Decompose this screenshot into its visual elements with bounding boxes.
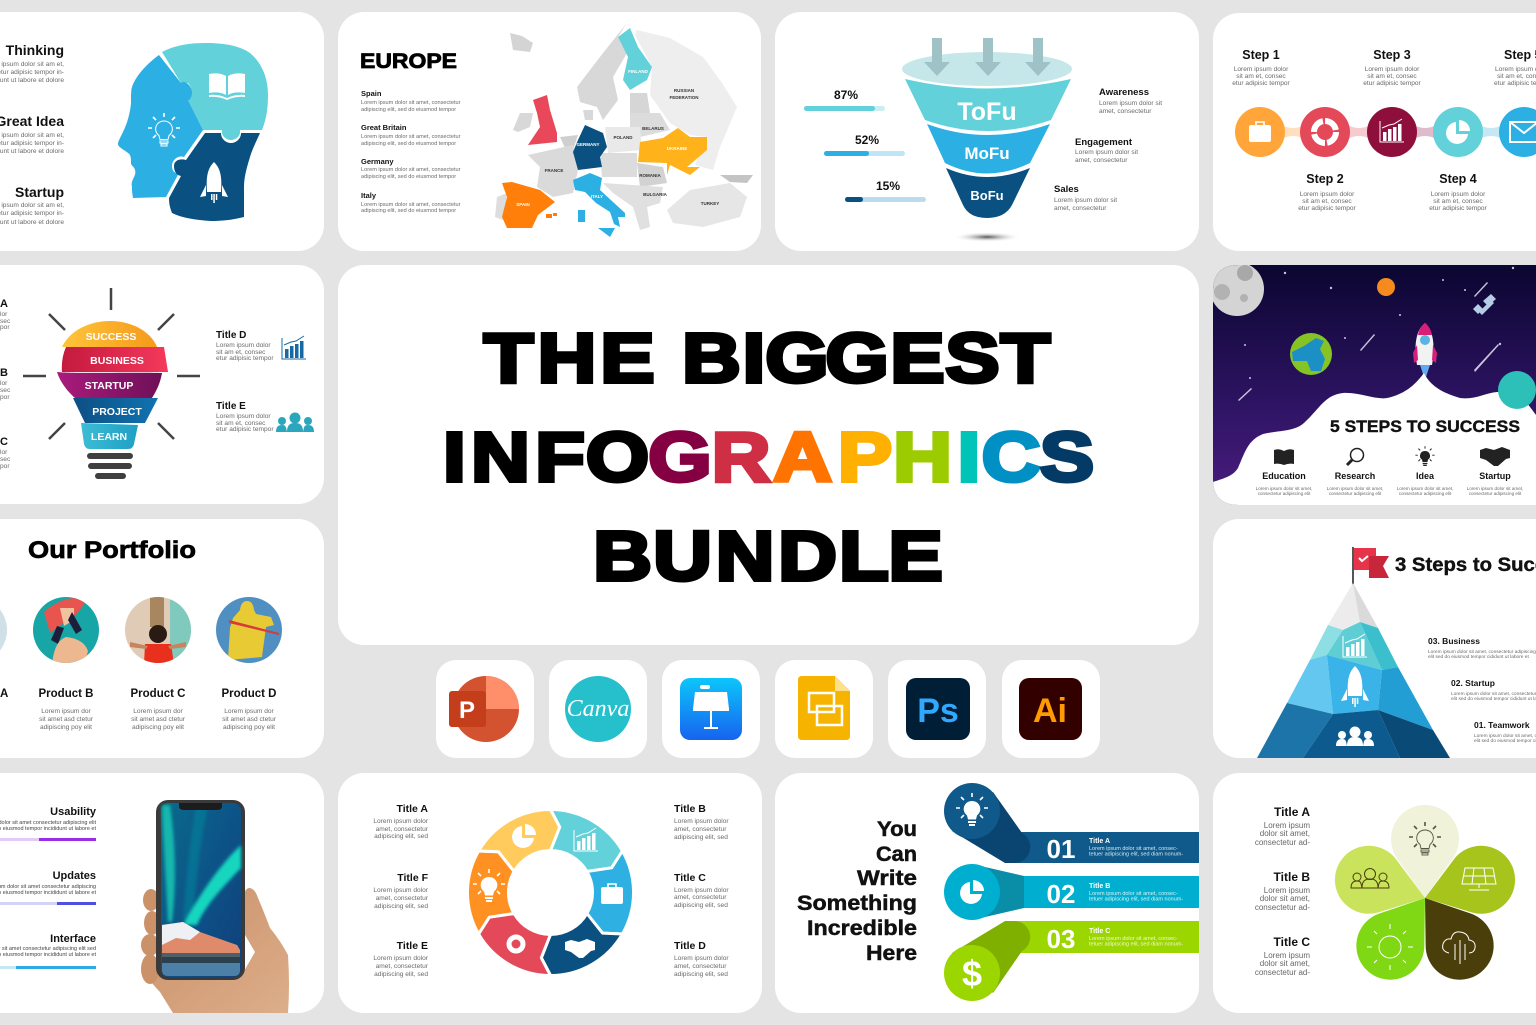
left labels: sec — [0, 456, 11, 463]
Title D: sit am et, consec — [216, 349, 266, 356]
progress 87% — [804, 88, 885, 111]
ribbon 01: tetuer adipiscing elit, sed diam nonum- — [1089, 852, 1183, 858]
label: Awareness: amet, consectetur — [1099, 108, 1152, 115]
Step 5 — [1494, 48, 1536, 87]
item: Great Britain: Lorem ipsum dolor sit amet, consectetur — [361, 134, 461, 140]
product D: Product D — [222, 688, 276, 700]
Title D — [216, 330, 274, 362]
map of Europe: SPAIN — [516, 202, 530, 207]
Title B: amet, consectetur — [674, 826, 727, 833]
funnel graphic: BoFu — [970, 188, 1004, 203]
panel: cycle — [338, 773, 762, 1013]
left labels: lor — [0, 449, 8, 456]
Title C: Title C — [1274, 935, 1310, 949]
label: Usability — [0, 806, 97, 841]
map of Europe: UKRAINE — [667, 146, 687, 151]
item: Germany: adipiscing elit, sed do eiusmod tempor — [361, 174, 456, 180]
step: Research: Lorem ipsum dolor sit amet, — [1327, 486, 1383, 491]
map of Europe: BELARUS — [642, 126, 664, 131]
Title C: adipiscing elit, sed — [674, 902, 728, 909]
label: 01 Teamwork: 01. Teamwork — [1474, 720, 1530, 730]
Title C: dolor sit amet, — [1260, 959, 1310, 968]
item: Germany: Germany — [361, 157, 394, 166]
heading stack: Here — [866, 942, 917, 965]
left labels: por — [0, 463, 10, 470]
Title B: Lorem ipsum — [1264, 886, 1310, 895]
Step 1: Lorem ipsum dolor — [1234, 66, 1289, 73]
label: 03 Business: 03. Business — [1428, 636, 1480, 646]
ribbon 01: Title A — [1089, 838, 1110, 845]
app icons row — [436, 660, 1100, 758]
Step 4: sit am et, consec — [1433, 198, 1483, 205]
Title F: Lorem ipsum dolor — [373, 887, 429, 894]
title line 1: THE BIGGEST — [484, 319, 1050, 398]
step: Idea — [1397, 446, 1453, 496]
funnel graphic: MoFu — [964, 144, 1010, 163]
label: Engagement: Engagement — [1075, 137, 1133, 148]
Title A: dolor sit amet, — [1260, 829, 1310, 838]
panel: petals — [1213, 773, 1536, 1013]
product C: Product C — [131, 688, 185, 700]
item: Italy: Italy — [361, 191, 377, 200]
Title C: Lorem ipsum — [1264, 951, 1310, 960]
step: Research: consectetur adipiscing elit — [1329, 491, 1382, 496]
label: Updates — [0, 870, 96, 905]
heading stack: Write — [857, 867, 917, 890]
Step 1: Step 1 — [1242, 48, 1280, 62]
progress 15%: 15% — [876, 179, 900, 193]
rocket — [1413, 323, 1437, 380]
tile: Canva — [549, 660, 647, 758]
Title E: Title E — [216, 401, 246, 412]
ribbon 01 — [944, 783, 1199, 864]
Title B — [674, 803, 729, 841]
satellite — [1473, 294, 1496, 315]
ribbon 02: Lorem ipsum dolor sit amet, consec- — [1089, 891, 1178, 897]
label: Engagement: Lorem ipsum dolor sit — [1075, 149, 1138, 156]
Step 2: Lorem ipsum dolor — [1300, 191, 1355, 198]
flag — [1352, 547, 1389, 589]
Title C — [1255, 935, 1310, 977]
stars and meteors — [1238, 267, 1514, 401]
ribbon 01: Lorem ipsum dolor sit amet, consec- — [1089, 846, 1178, 852]
planet teal — [1498, 371, 1536, 409]
Title C — [674, 872, 729, 909]
Step 3: Step 3 — [1373, 48, 1411, 62]
item: Italy — [361, 191, 461, 214]
step: Idea: consectetur adipiscing elit — [1399, 491, 1452, 496]
Title D: adipiscing elit, sed — [674, 971, 728, 978]
left labels: sec — [0, 318, 11, 325]
Step 1: sit am et, consec — [1236, 73, 1286, 80]
connectors — [1280, 124, 1504, 140]
heading: Startup: Startup — [15, 184, 64, 200]
label: Interface — [0, 933, 96, 969]
Title A: Lorem ipsum — [1264, 821, 1310, 830]
progress 15% — [845, 179, 926, 202]
Step 4: Lorem ipsum dolor — [1431, 191, 1486, 198]
Title A: Lorem ipsum dolor — [373, 818, 429, 825]
label: Sales — [1054, 184, 1117, 212]
item: Italy: Lorem ipsum dolor sit amet, consectetur — [361, 202, 461, 208]
lightbulb stack: BUSINESS — [90, 355, 144, 367]
label: 02 Startup: 02. Startup — [1451, 678, 1495, 688]
ribbon 03: tetuer adipiscing elit, sed diam nonum- — [1089, 942, 1183, 948]
tile: Illustrator — [1002, 660, 1100, 758]
left labels: C — [0, 436, 8, 448]
ribbon 03: 03 — [1047, 924, 1075, 954]
item: Great Britain — [361, 123, 461, 147]
left labels: B — [0, 367, 8, 379]
tile: Photoshop: Ps — [917, 692, 959, 730]
Title A: consectetur ad- — [1255, 838, 1310, 847]
panel: funnel — [775, 12, 1199, 251]
panel: head puzzle — [0, 12, 324, 251]
product D — [216, 597, 282, 731]
Step 4: etur adipisic tempor — [1429, 205, 1488, 212]
map of Europe: FINLAND — [628, 69, 649, 74]
label: 03 Business: Lorem ipsum dolor sit amet, consectetur adipiscing — [1428, 649, 1536, 655]
step: Idea: Idea — [1416, 471, 1435, 481]
Title C: consectetur ad- — [1255, 968, 1310, 977]
Step 4 — [1429, 172, 1488, 212]
Title F: Title F — [397, 872, 429, 884]
map of Europe: BULGARIA — [643, 192, 668, 197]
Step 4: Step 4 — [1439, 172, 1477, 186]
Title E — [216, 401, 274, 433]
item: Italy: adipiscing elit, sed do eiusmod tempor — [361, 208, 456, 214]
panel: 3 steps mountain — [1213, 519, 1536, 758]
Title B: adipiscing elit, sed — [674, 834, 728, 841]
product B: Product B — [39, 688, 93, 700]
item: Spain — [361, 89, 461, 113]
product D: Lorem ipsum dor — [224, 708, 275, 715]
Step 2 — [1298, 172, 1357, 212]
step: Education: Education — [1262, 471, 1306, 481]
Title D — [674, 940, 729, 978]
Title C: Lorem ipsum dolor — [674, 887, 729, 894]
label: Updates: Updates — [53, 870, 96, 882]
label: Sales: amet, consectetur — [1054, 205, 1107, 212]
Title D: Lorem ipsum dolor — [674, 955, 729, 962]
panel: Europe map — [338, 12, 761, 251]
lightbulb stack: STARTUP — [85, 380, 133, 392]
progress 52%: 52% — [855, 133, 879, 147]
product A — [0, 597, 8, 700]
heading: Great Idea — [0, 113, 64, 155]
Title A: Title A — [1274, 805, 1310, 819]
item: Great Britain: adipiscing elit, sed do eiusmod tempor — [361, 141, 456, 147]
cycle icons — [473, 824, 623, 958]
map of Europe: ROMANIA — [639, 173, 661, 178]
Step 2: sit am et, consec — [1302, 198, 1352, 205]
left labels: por — [0, 324, 10, 331]
tile: PowerPoint — [436, 660, 534, 758]
tile: Canva: Canva — [567, 696, 629, 722]
left labels: lor — [0, 311, 8, 318]
Step 1 — [1232, 48, 1291, 87]
Title A — [1255, 805, 1310, 847]
Title E: sit am et, consec — [216, 420, 266, 427]
ribbon 01: 01 — [1047, 834, 1075, 864]
petal icons — [1351, 822, 1496, 970]
item: Spain: Lorem ipsum dolor sit amet, consectetur — [361, 100, 461, 106]
ribbon 02: tetuer adipiscing elit, sed diam nonum- — [1089, 896, 1183, 902]
heading: Thinking — [0, 42, 64, 84]
product C — [125, 597, 195, 731]
planet earth — [1290, 333, 1332, 375]
panel: phone — [0, 773, 324, 1013]
left labels: lor — [0, 380, 8, 387]
left labels — [0, 298, 11, 470]
Title A: adipiscing elit, sed — [374, 833, 428, 840]
product D: adipiscing poy elit — [223, 724, 275, 731]
rays — [23, 288, 200, 439]
step: Startup: Lorem ipsum dolor sit amet, — [1467, 486, 1523, 491]
Title E: etur adipisic tempor — [216, 426, 274, 433]
Title C: amet, consectetur — [674, 894, 727, 901]
label: Awareness: Lorem ipsum dolor sit — [1099, 100, 1162, 107]
label: 03 Business — [1428, 636, 1536, 660]
step: Education: consectetur adipiscing elit — [1258, 491, 1311, 496]
Title E: Title E — [397, 940, 428, 952]
Title C: Title C — [674, 872, 706, 884]
Step 3 — [1363, 48, 1422, 87]
Title E: Lorem ipsum dolor — [216, 413, 271, 420]
step: Research — [1327, 448, 1383, 496]
ribbon 02 — [944, 864, 1199, 920]
heading: Startup — [0, 184, 64, 226]
Title F: amet, consectetur — [376, 895, 429, 902]
Title A — [373, 803, 429, 840]
label: 01 Teamwork — [1474, 720, 1536, 744]
product A: A — [0, 688, 8, 700]
ribbon 02: Title B — [1089, 883, 1110, 890]
panel: portfolio — [0, 519, 324, 758]
panel: main title — [338, 265, 1199, 645]
cloud — [1213, 373, 1536, 505]
label: Sales: Sales — [1054, 184, 1079, 195]
Title D: etur adipisic tempor — [216, 355, 274, 362]
left labels: sec — [0, 387, 11, 394]
icon: chart — [282, 336, 306, 359]
panel: bulb — [0, 265, 324, 504]
Title D: Lorem ipsum dolor — [216, 342, 271, 349]
Step 3: etur adipisic tempor — [1363, 80, 1422, 87]
step: Research: Research — [1335, 471, 1375, 481]
ribbon 03: Lorem ipsum dolor sit amet, consec- — [1089, 936, 1178, 942]
heading stack: You — [877, 818, 917, 841]
step circles — [1235, 107, 1536, 157]
ribbon 03: Title C — [1089, 928, 1110, 935]
Step 1: etur adipisic tempor — [1232, 80, 1291, 87]
heading: Our Portfolio: Our Portfolio — [28, 537, 196, 564]
tile: Google Slides — [775, 660, 873, 758]
label: Engagement: amet, consectetur — [1075, 157, 1128, 164]
product B: sit amet asd ctetur — [39, 716, 94, 723]
Title D: Title D — [216, 330, 246, 341]
Title A: amet, consectetur — [376, 826, 429, 833]
panel: steps — [1213, 13, 1536, 251]
lightbulb stack: SUCCESS — [86, 331, 136, 343]
step: Startup: Startup — [1479, 471, 1511, 481]
item: Germany — [361, 157, 461, 180]
label: Usability: Usability — [50, 806, 97, 818]
progress 87%: 87% — [834, 88, 858, 102]
Title F — [373, 872, 429, 910]
Title D: amet, consectetur — [674, 963, 727, 970]
heading: 5 steps: 5 STEPS TO SUCCESS — [1330, 417, 1520, 436]
label: 03 Business: elit sed do eiusmod tempor cididunt ut labore et — [1428, 654, 1529, 660]
heading: EUROPE: EUROPE — [360, 50, 457, 73]
mountain — [1257, 583, 1450, 758]
map of Europe — [495, 23, 753, 237]
panel: ribbons — [775, 773, 1199, 1013]
Step 2: etur adipisic tempor — [1298, 205, 1357, 212]
heading stack — [797, 818, 917, 965]
flower diagram — [1326, 805, 1524, 993]
Title B: consectetur ad- — [1255, 903, 1310, 912]
product D: sit amet asd ctetur — [222, 716, 277, 723]
Title B: Title B — [674, 803, 706, 815]
ribbon 03 — [944, 921, 1199, 1001]
label: Awareness — [1099, 87, 1162, 115]
product B: Lorem ipsum dor — [41, 708, 92, 715]
title line 3: BUNDLE — [593, 517, 943, 596]
heading stack: Incredible — [807, 917, 917, 940]
tile: PowerPoint: P — [459, 697, 475, 724]
map of Europe: FRANCE — [545, 168, 563, 173]
left labels: por — [0, 394, 10, 401]
ribbon 03: $ — [962, 953, 982, 994]
map of Europe: FEDERATION — [670, 95, 698, 100]
map of Europe: GERMANY — [576, 142, 600, 147]
heading stack: Something — [797, 892, 917, 915]
tile: Photoshop — [888, 660, 986, 758]
label: Sales: Lorem ipsum dolor sit — [1054, 197, 1117, 204]
item: Spain: Spain — [361, 89, 382, 98]
planet orange — [1377, 278, 1395, 296]
heading: Thinking: Thinking — [6, 42, 64, 58]
label: 02 Startup — [1451, 678, 1536, 702]
map of Europe: ITALY — [591, 194, 603, 199]
product B — [33, 597, 99, 731]
Title B: Lorem ipsum dolor — [674, 818, 729, 825]
step: Idea: Lorem ipsum dolor sit amet, — [1397, 486, 1453, 491]
step: Startup — [1467, 447, 1523, 496]
left labels: A — [0, 298, 8, 310]
product C: adipiscing poy elit — [132, 724, 184, 731]
Title B: Title B — [1274, 870, 1310, 884]
heading stack: Can — [876, 843, 917, 866]
label: Interface: Interface — [50, 933, 96, 945]
step: Education — [1256, 449, 1312, 496]
funnel graphic — [902, 38, 1072, 242]
map of Europe: TURKEY — [701, 201, 719, 206]
tile: Keynote — [662, 660, 760, 758]
label: Awareness: Awareness — [1099, 87, 1149, 98]
lightbulb stack — [57, 321, 168, 479]
Title A: Title A — [396, 803, 428, 815]
head illustration — [118, 43, 268, 221]
product B: adipiscing poy elit — [40, 724, 92, 731]
lightbulb stack: PROJECT — [92, 406, 142, 418]
map of Europe: RUSSIAN — [674, 88, 694, 93]
phone in hand — [141, 800, 289, 1013]
Step 2: Step 2 — [1306, 172, 1344, 186]
title line 2: INFOGRAPHICS — [443, 418, 1094, 497]
Title E: adipiscing elit, sed — [374, 971, 428, 978]
label: Engagement — [1075, 137, 1138, 164]
map of Europe: POLAND — [614, 135, 633, 140]
Title B: dolor sit amet, — [1260, 894, 1310, 903]
item: Germany: Lorem ipsum dolor sit amet, consectetur — [361, 167, 461, 173]
cycle diagram — [467, 810, 634, 976]
Title E: amet, consectetur — [376, 963, 429, 970]
panel: space — [1210, 262, 1536, 505]
Title D: Title D — [674, 940, 706, 952]
item: Spain: adipiscing elit, sed do eiusmod tempor — [361, 107, 456, 113]
Title B — [1255, 870, 1310, 912]
item: Great Britain: Great Britain — [361, 123, 407, 132]
lightbulb stack: LEARN — [91, 431, 127, 443]
Step 3: Lorem ipsum dolor — [1365, 66, 1420, 73]
moon — [1213, 265, 1264, 316]
progress 52% — [824, 133, 905, 156]
product C: sit amet asd ctetur — [131, 716, 186, 723]
step: Education: Lorem ipsum dolor sit amet, — [1256, 486, 1312, 491]
funnel graphic: ToFu — [957, 98, 1017, 126]
Title E: Lorem ipsum dolor — [373, 955, 429, 962]
Step 3: sit am et, consec — [1367, 73, 1417, 80]
Title F: adipiscing elit, sed — [374, 903, 428, 910]
ribbon 02: 02 — [1047, 879, 1075, 909]
icon: people — [276, 412, 314, 432]
tile: Illustrator: Ai — [1033, 692, 1067, 730]
Title E — [373, 940, 429, 978]
product C: Lorem ipsum dor — [133, 708, 184, 715]
step: Startup: consectetur adipiscing elit — [1469, 491, 1522, 496]
